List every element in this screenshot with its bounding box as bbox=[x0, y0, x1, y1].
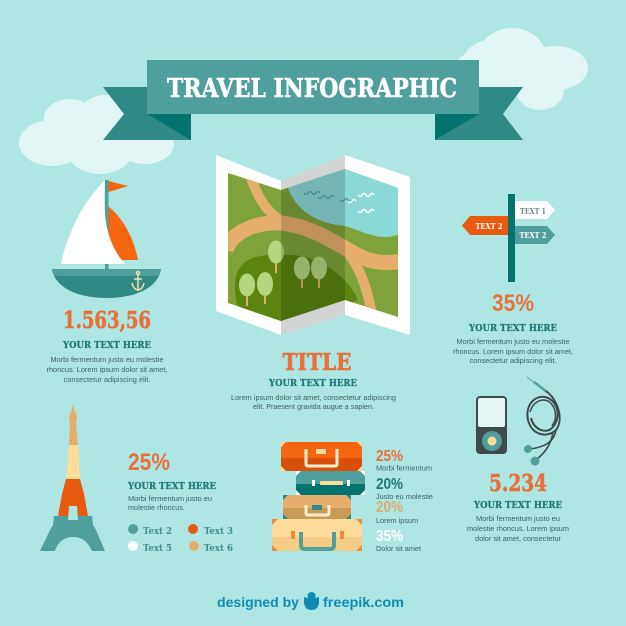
boat stat: rhoncus. Lorem ipsum dolor sit amet, bbox=[46, 367, 168, 374]
center title block: YOUR TEXT HERE bbox=[268, 378, 357, 389]
cloud right bbox=[455, 28, 588, 110]
signpost stat: 35% bbox=[492, 290, 534, 317]
icon: anchor bbox=[132, 272, 144, 290]
suitcase percentages: Justo eu molestie bbox=[376, 494, 433, 501]
cloud left bbox=[19, 95, 174, 174]
eiffel tower bbox=[40, 404, 105, 551]
eiffel stat: Morbi fermentum justo eu bbox=[128, 496, 212, 503]
eiffel stat bbox=[127, 449, 216, 512]
music stat: dolor sit amet, consectetur bbox=[475, 536, 562, 543]
suitcase percentages: 20% bbox=[376, 499, 403, 516]
eiffel stat: YOUR TEXT HERE bbox=[127, 481, 216, 492]
legend: Text 5 bbox=[143, 543, 172, 554]
center title block: elit. Praesent gravida augue a sapien. bbox=[253, 404, 374, 411]
footer credit: freepik.com bbox=[323, 594, 404, 610]
suitcase percentages bbox=[376, 448, 433, 553]
sailboat bbox=[52, 180, 161, 298]
eiffel stat: 25% bbox=[128, 449, 170, 476]
signpost stat bbox=[453, 290, 573, 365]
suitcase percentages: 20% bbox=[376, 476, 403, 493]
suitcase percentages: Morbi fermentum bbox=[376, 466, 432, 472]
signpost: TEXT 2 bbox=[520, 230, 546, 240]
suitcases bbox=[272, 442, 365, 551]
music stat: molestie rhoncus. Lorem ipsum bbox=[467, 526, 569, 533]
center title block: TITLE bbox=[282, 349, 352, 376]
eiffel stat: molestie rhoncus. bbox=[128, 505, 185, 512]
suitcase percentages: Lorem ipsum bbox=[376, 518, 418, 525]
center title block bbox=[231, 349, 396, 411]
music stat: Morbi fermentum justo eu bbox=[476, 516, 560, 523]
boat stat: consectetur adipiscing elit. bbox=[64, 377, 151, 384]
title ribbon bbox=[103, 60, 523, 140]
center title block: Lorem ipsum dolor sit amet, consectetur adipiscing bbox=[231, 395, 396, 402]
signpost: TEXT 1 bbox=[520, 206, 546, 216]
signpost stat: consectetur adipiscing elit. bbox=[470, 358, 557, 365]
legend: Text 3 bbox=[204, 526, 233, 537]
boat stat bbox=[46, 307, 168, 384]
boat stat: YOUR TEXT HERE bbox=[62, 340, 151, 351]
suitcase percentages: 25% bbox=[376, 448, 403, 465]
signpost stat: YOUR TEXT HERE bbox=[468, 323, 557, 334]
signpost bbox=[462, 194, 555, 282]
boat stat: 1.563,56 bbox=[63, 307, 151, 334]
icon: freepik logo bbox=[304, 592, 319, 610]
music player bbox=[476, 396, 507, 454]
music stat bbox=[467, 470, 569, 543]
legend: Text 6 bbox=[204, 543, 233, 554]
suitcase percentages: Dolor sit amet bbox=[376, 546, 421, 553]
signpost stat: Morbi fermentum justo eu molestie bbox=[456, 339, 570, 346]
boat stat: Morbi fermentum justo eu molestie bbox=[50, 357, 164, 364]
map bbox=[216, 155, 410, 335]
legend bbox=[128, 524, 233, 554]
signpost stat: rhoncus. Lorem ipsum dolor sit amet, bbox=[453, 349, 573, 356]
music stat: 5.234 bbox=[489, 470, 547, 497]
earphones bbox=[524, 377, 560, 466]
suitcase percentages: 35% bbox=[376, 528, 403, 545]
footer credit: designed by bbox=[217, 594, 299, 610]
title: TRAVEL INFOGRAPHIC bbox=[167, 74, 457, 104]
legend: Text 2 bbox=[143, 526, 172, 537]
signpost: TEXT 2 bbox=[476, 221, 502, 231]
music stat: YOUR TEXT HERE bbox=[473, 500, 562, 511]
footer credit bbox=[217, 592, 404, 610]
